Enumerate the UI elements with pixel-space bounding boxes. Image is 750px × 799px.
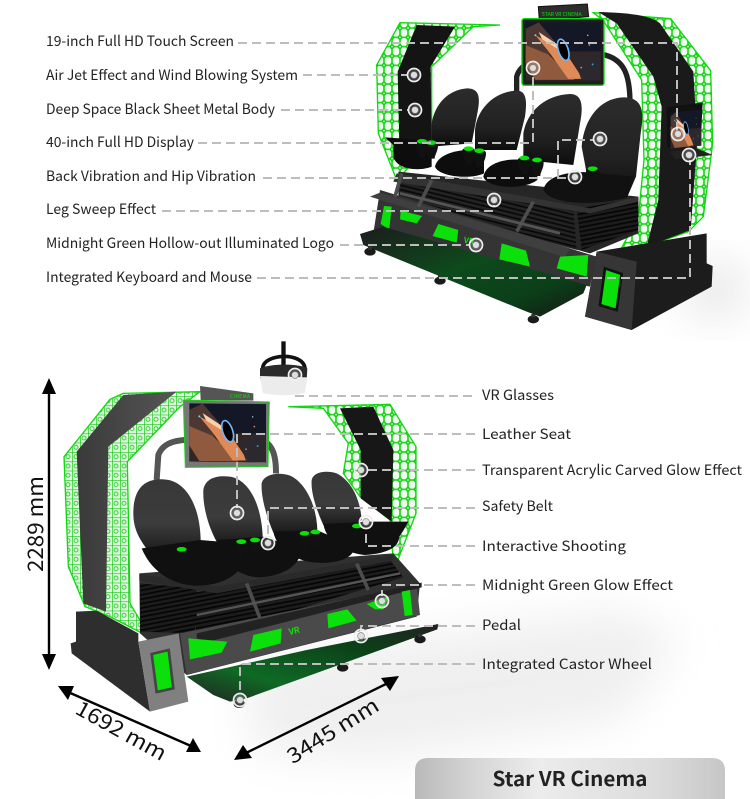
feature labels: lower machine	[482, 385, 743, 674]
side touch screen	[667, 102, 713, 159]
left arch	[377, 23, 500, 180]
leader lines: lower machine	[237, 396, 475, 695]
dimension: depth arrow	[58, 686, 201, 752]
feature labels: lower machine: Integrated Castor Wheel	[482, 654, 652, 674]
feature labels: upper machine: 40-inch Full HD Display	[46, 132, 195, 152]
illustration: lower VR cinema machine, front-left view	[64, 341, 438, 712]
feature labels: upper machine: Midnight Green Hollow-out Illuminated Logo	[46, 233, 334, 253]
casters	[364, 246, 539, 323]
feature labels: upper machine: Air Jet Effect and Wind Blowing System	[46, 65, 298, 85]
base pedestal	[370, 172, 638, 287]
main display and logo sign	[522, 4, 604, 85]
main display and logo sign: STAR VR CINEMA	[542, 10, 582, 18]
feature labels: lower machine: VR Glasses	[482, 385, 554, 405]
feature labels: upper machine: Deep Space Black Sheet Metal Body	[46, 99, 276, 119]
machine logo: VR	[462, 235, 475, 248]
floor shadow: upper machine	[681, 262, 749, 318]
left arch	[64, 392, 200, 637]
feature labels: upper machine: Back Vibration and Hip Vibration	[46, 166, 256, 186]
casters	[234, 634, 426, 708]
green light panels	[188, 590, 413, 659]
side plinth	[585, 233, 713, 330]
pedal platform	[187, 624, 438, 702]
pedal platform	[360, 227, 587, 317]
product name banner: Star VR Cinema	[492, 763, 648, 792]
right arch	[593, 12, 713, 254]
feature labels: lower machine: Transparent Acrylic Carved Glow Effect	[482, 460, 743, 480]
feature labels: upper machine: 19-inch Full HD Touch Screen	[46, 31, 234, 51]
markers: upper machine	[408, 62, 696, 252]
display support arch	[517, 55, 630, 103]
product name banner	[415, 758, 725, 799]
right arch	[288, 404, 416, 570]
VR glasses	[260, 341, 307, 395]
feature labels: upper machine: Leg Sweep Effect	[46, 199, 157, 219]
dimension: depth value: 1692 mm	[70, 693, 172, 767]
main display and logo sign	[183, 386, 269, 467]
illustration: upper VR cinema machine, rear-right view	[360, 4, 713, 330]
dimension: width value: 3445 mm	[280, 690, 385, 770]
floor shadow: lower machine	[250, 610, 680, 760]
feature labels: lower machine: Midnight Green Glow Effect	[482, 575, 674, 595]
base pedestal	[139, 553, 422, 675]
feature labels: lower machine: Leather Seat	[482, 424, 572, 444]
dimension: height arrow	[42, 378, 56, 670]
feature labels: lower machine: Safety Belt	[482, 496, 554, 516]
feature labels: upper machine: Integrated Keyboard and Mouse	[46, 267, 252, 287]
four seats	[385, 88, 642, 203]
dimension: width arrow	[234, 676, 399, 760]
four seats	[133, 472, 408, 586]
feature labels: upper machine	[46, 31, 334, 287]
feature labels: lower machine: Interactive Shooting	[482, 536, 626, 556]
machine logo: VR	[286, 624, 301, 638]
dimension: height value: 2289 mm	[20, 476, 50, 572]
feature labels: lower machine: Pedal	[482, 615, 521, 635]
leader lines: upper machine	[162, 43, 690, 278]
side plinth	[71, 611, 188, 712]
markers: lower machine	[230, 368, 388, 706]
green light panels	[381, 206, 588, 277]
main display and logo sign: CINEMA	[230, 393, 250, 400]
display support arch	[157, 439, 276, 480]
